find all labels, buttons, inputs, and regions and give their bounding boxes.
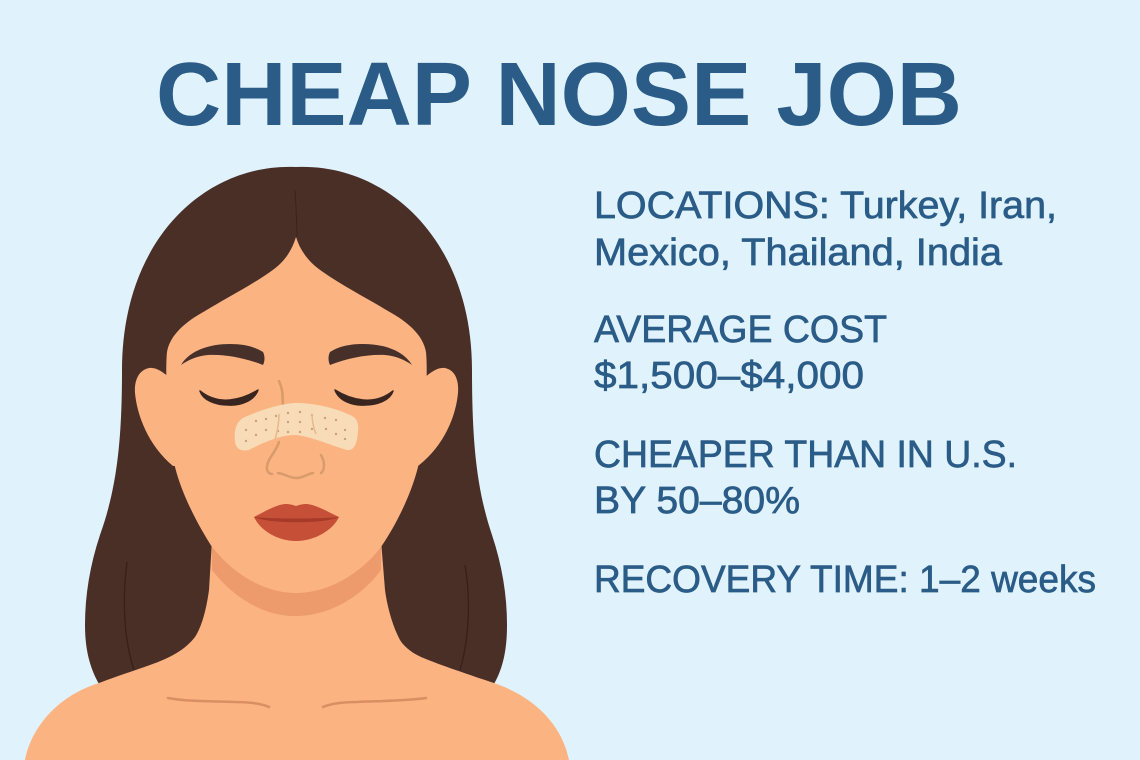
title: CHEAP NOSE JOB	[156, 45, 962, 145]
collarbones	[168, 698, 426, 707]
left closed eye	[200, 390, 258, 405]
lips	[254, 504, 339, 541]
text block: average cost: $1,500–$4,000	[594, 355, 864, 397]
text block: average cost: AVERAGE COST	[594, 309, 887, 351]
text block: average cost	[594, 309, 887, 397]
text block: locations: LOCATIONS: Turkey, Iran,	[594, 185, 1057, 227]
right closed eye	[335, 390, 393, 405]
right ear	[404, 368, 458, 466]
nose bandage	[235, 403, 358, 451]
text block: cheaper than U.S.: BY 50–80%	[594, 480, 800, 522]
hair	[85, 167, 507, 684]
left ear	[135, 368, 190, 466]
text block: cheaper than U.S.	[594, 434, 1017, 522]
illustration: woman with nose bandage	[25, 167, 569, 760]
text block: locations: Mexico, Thailand, India	[594, 232, 1003, 274]
nose	[267, 381, 324, 478]
text block: locations	[594, 185, 1057, 274]
neck and shoulders	[25, 540, 569, 760]
text block: recovery time: RECOVERY TIME: 1–2 weeks	[594, 559, 1096, 601]
left eyebrow	[181, 344, 264, 365]
text block: cheaper than U.S.: CHEAPER THAN IN U.S.	[594, 434, 1017, 476]
right eyebrow	[328, 344, 412, 365]
face	[166, 237, 427, 593]
neck shadow	[212, 547, 381, 616]
